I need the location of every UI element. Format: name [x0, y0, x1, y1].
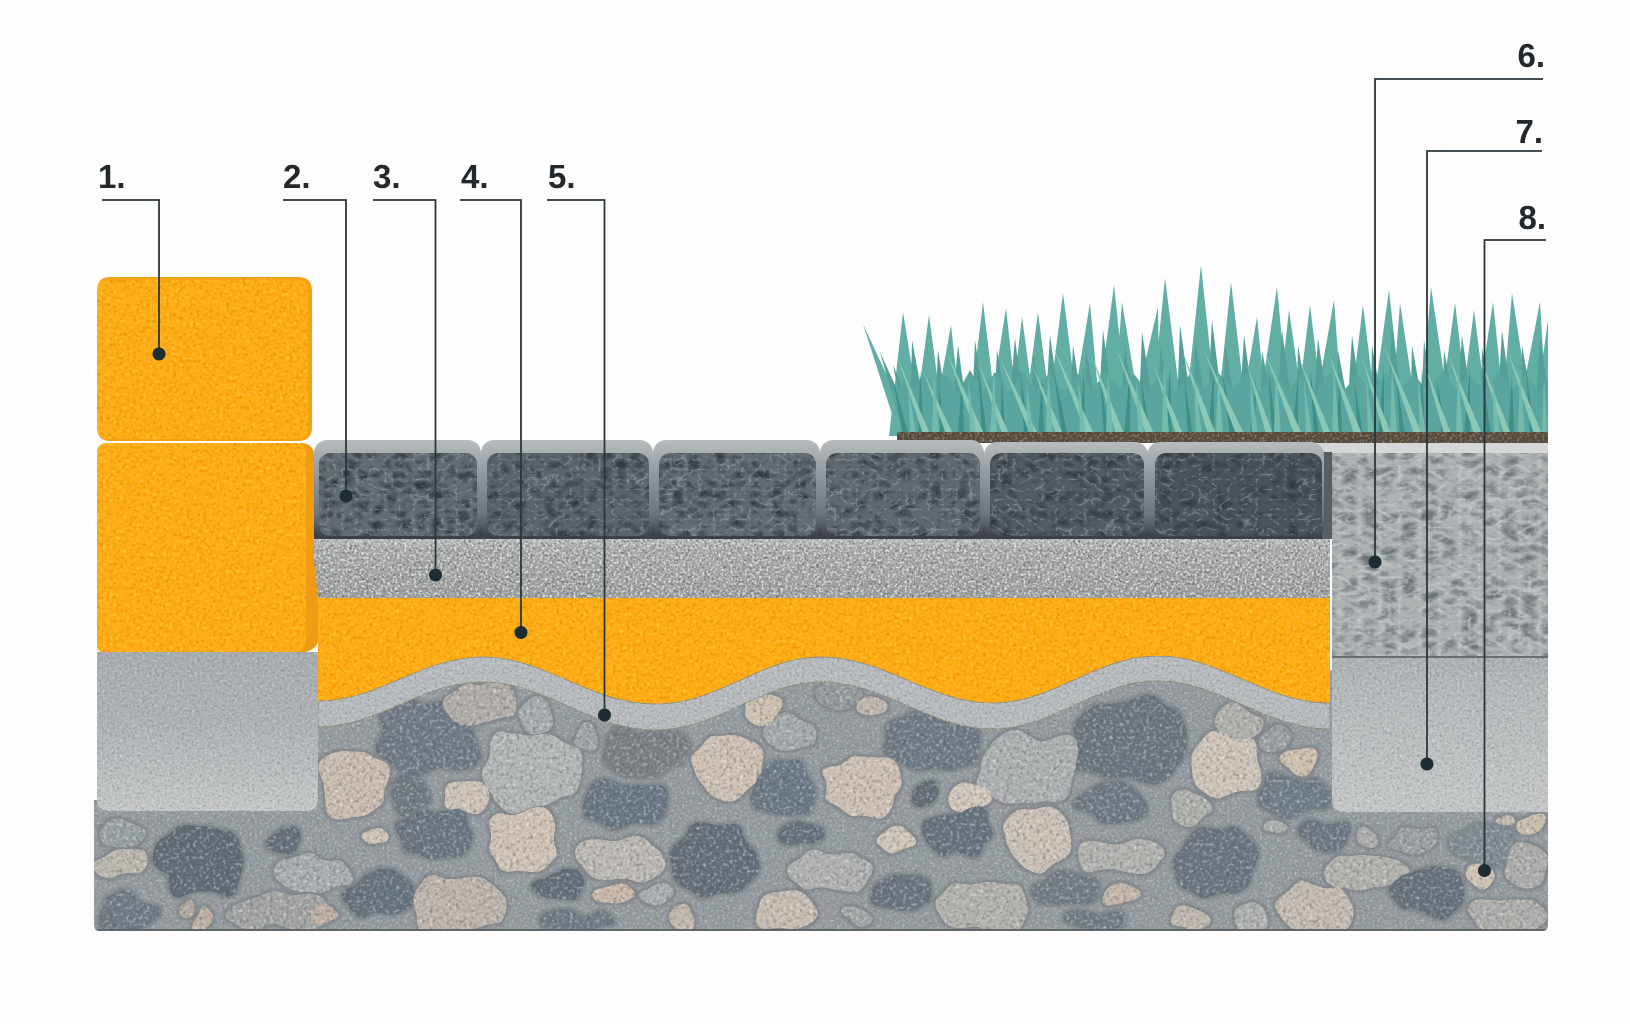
paver 4: [820, 440, 984, 539]
layer: orange base: [318, 598, 1330, 704]
label 1: 1.: [98, 158, 126, 195]
label 3: 3.: [373, 158, 401, 195]
grass: light front blades: [897, 344, 1542, 434]
label 5: 5.: [548, 158, 576, 195]
paver seams backing: [314, 490, 1326, 539]
left edge of sand: [306, 540, 318, 600]
label 7: [1420, 113, 1543, 770]
side shading: [290, 443, 318, 652]
right seam shadow: [1322, 452, 1332, 539]
grass: middle blades: [880, 320, 1546, 424]
paver 2: [481, 440, 653, 539]
gravel background: [94, 670, 1548, 931]
layer: wavy geotextile membrane: [318, 656, 1330, 730]
label 8: [1478, 199, 1546, 877]
label 8: 8.: [1518, 199, 1546, 236]
outer white guard right of grass: [1548, 240, 1630, 940]
label 4: 4.: [461, 158, 489, 195]
left orange block lower: [97, 443, 318, 652]
left orange block upper: [97, 277, 312, 441]
right curb upper block: [1318, 443, 1548, 658]
label 6: 6.: [1517, 37, 1545, 74]
label 1: [98, 158, 166, 360]
paver 1: [314, 440, 481, 539]
paver 5: [984, 442, 1148, 539]
grass: back blades: [863, 265, 1558, 436]
layer: sand bedding: [306, 538, 1330, 600]
bottom edge: [94, 929, 1548, 931]
label 7: 7.: [1515, 113, 1543, 150]
left curb base block: [97, 652, 318, 811]
label 2: [283, 158, 352, 502]
label 4: [460, 158, 528, 639]
label 5: [547, 158, 611, 722]
stones: [96, 682, 1548, 931]
label 2: 2.: [283, 158, 311, 195]
grass: [863, 265, 1558, 444]
soil strip: [897, 432, 1548, 443]
rim: [1318, 443, 1548, 470]
gravel base panel: [94, 670, 1548, 931]
label 3: [373, 158, 442, 582]
paver 6: [1147, 442, 1324, 539]
label 6: [1368, 37, 1545, 568]
grass: dark thin blades: [893, 365, 1535, 436]
paver 3: [653, 440, 820, 539]
pavers: [314, 440, 1332, 539]
right curb lower block: [1332, 656, 1548, 812]
grass: lower fill: [890, 370, 1535, 424]
grass: pale vertical blades: [908, 362, 1547, 434]
